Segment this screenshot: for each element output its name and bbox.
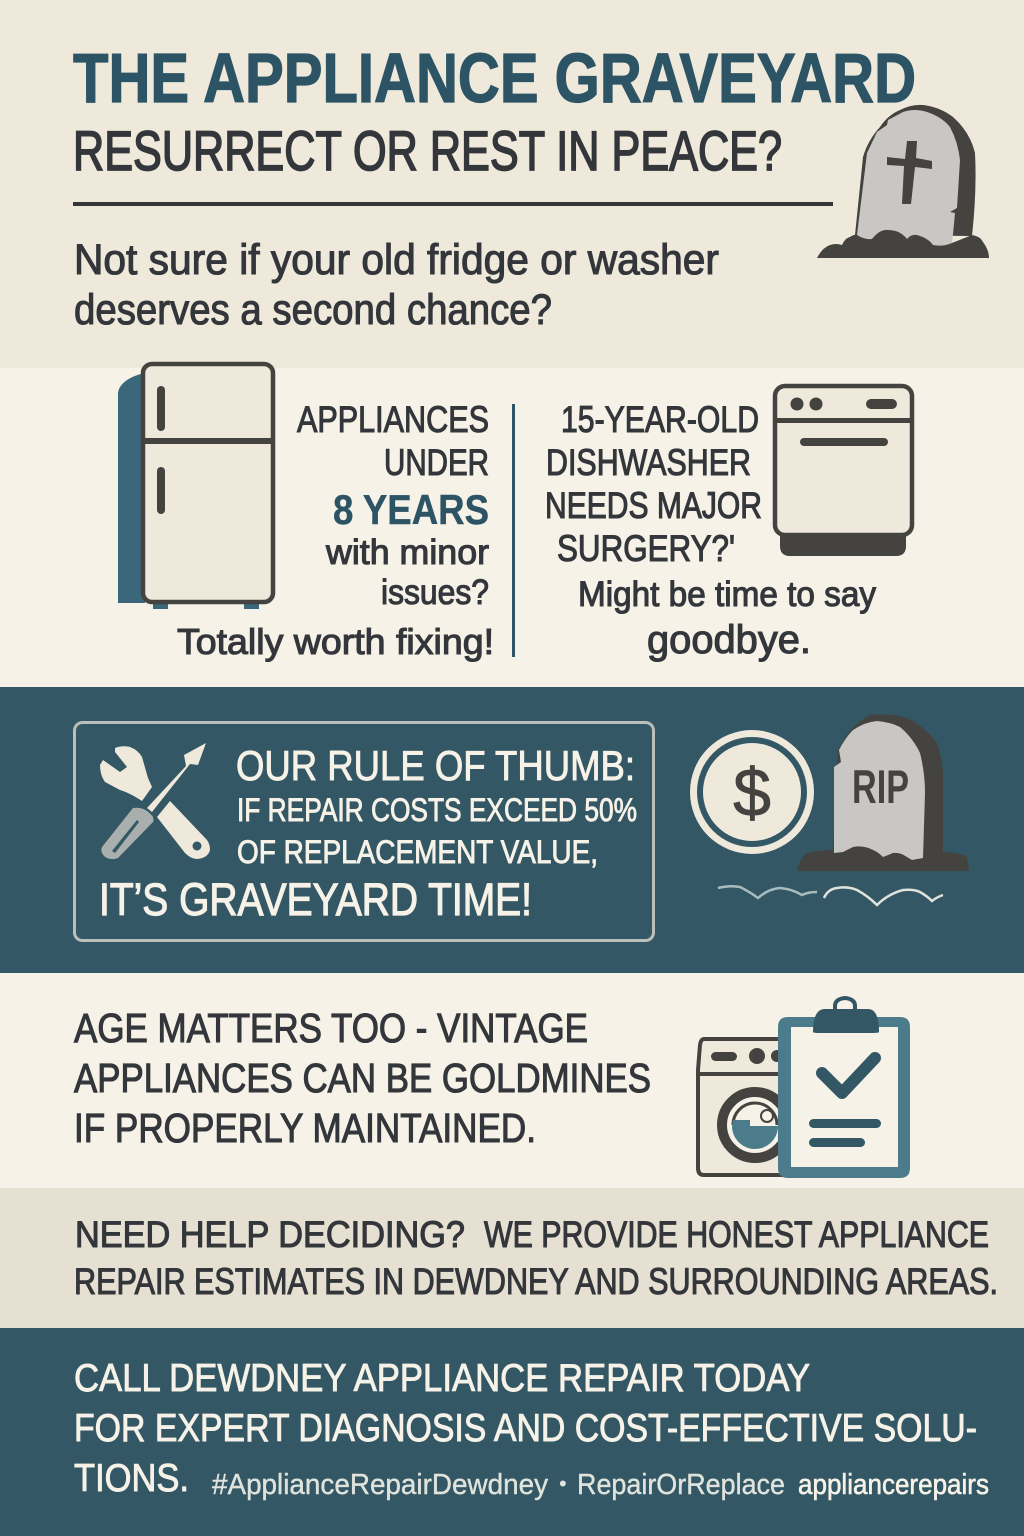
- subtitle: RESURRECT OR REST IN PEACE?: [73, 119, 782, 182]
- title rule: [73, 202, 833, 206]
- text block: 15-year-old dishwasher: 15-YEAR-OLD: [561, 399, 759, 440]
- icon: RIP tombstone: RIP: [852, 760, 909, 813]
- icon: crossed wrench and screwdriver: [100, 743, 210, 859]
- panel: call to action background: [0, 1328, 1024, 1536]
- icon: tombstone with cross: [817, 105, 989, 258]
- panel: age matters background: [0, 973, 1024, 1188]
- text block: under 8 years: with minor: [325, 533, 489, 572]
- text block: need help deciding: [74, 1214, 998, 1302]
- column divider: [512, 404, 515, 657]
- text block: age matters: IF PROPERLY MAINTAINED.: [74, 1105, 536, 1151]
- hashtags: [212, 1469, 989, 1501]
- text block: 15-year-old dishwasher: Might be time to say: [578, 575, 876, 614]
- panel: rule of thumb background: [0, 687, 1024, 973]
- hashtags: RepairOrReplace: [577, 1469, 785, 1501]
- text block: under 8 years: Totally worth fixing!: [177, 621, 494, 662]
- text block: 15-year-old dishwasher: goodbye.: [647, 618, 811, 662]
- hashtags: •: [559, 1471, 567, 1496]
- text block: 15-year-old dishwasher: DISHWASHER: [546, 442, 751, 483]
- panel: comparison background: [0, 368, 1024, 687]
- text block: under 8 years: issues?: [381, 573, 489, 612]
- text block: age matters: APPLIANCES CAN BE GOLDMINES: [74, 1055, 651, 1101]
- text block: call to action: TIONS.: [74, 1457, 189, 1500]
- text block: 15-year-old dishwasher: [545, 399, 876, 662]
- icon: RIP tombstone: [797, 714, 969, 871]
- icon: dollar coin: [690, 730, 814, 854]
- intro text: deserves a second chance?: [74, 286, 552, 334]
- icon: dishwasher: [775, 386, 912, 556]
- text block: 15-year-old dishwasher: SURGERY?': [557, 528, 735, 569]
- intro text: Not sure if your old fridge or washer: [74, 236, 719, 284]
- text block: age matters: AGE MATTERS TOO - VINTAGE: [74, 1005, 588, 1051]
- text block: call to action: [74, 1357, 977, 1500]
- panel: header background: [0, 0, 1024, 368]
- callout text: OUR RULE OF THUMB:: [236, 742, 635, 789]
- icon: dollar coin: $: [733, 755, 771, 831]
- text block: age matters: [74, 1005, 651, 1151]
- icon: refrigerator: [118, 364, 273, 609]
- callout: rule of thumb: [74, 722, 654, 940]
- intro text: [74, 236, 719, 334]
- text block: under 8 years: 8 YEARS: [333, 486, 489, 533]
- text block: 15-year-old dishwasher: NEEDS MAJOR: [545, 485, 762, 526]
- text block: under 8 years: APPLIANCES: [297, 399, 489, 440]
- callout text: IT’S GRAVEYARD TIME!: [99, 874, 532, 925]
- text block: need help deciding: NEED HELP DECIDING?: [75, 1214, 465, 1255]
- text block: call to action: CALL DEWDNEY APPLIANCE REPAIR TODAY: [74, 1357, 810, 1400]
- callout text: OF REPLACEMENT VALUE,: [237, 834, 598, 870]
- icon: washing machine: [697, 1039, 792, 1175]
- text block: under 8 years: [177, 399, 494, 662]
- callout text: [99, 742, 637, 925]
- panel: need help background: [0, 1188, 1024, 1328]
- hashtags: appliancerepairs: [798, 1469, 989, 1501]
- hashtags: #ApplianceRepairDewdney: [212, 1469, 548, 1501]
- icon: ground swooshes: [718, 886, 943, 905]
- callout text: IF REPAIR COSTS EXCEED 50%: [237, 792, 637, 828]
- text block: under 8 years: UNDER: [384, 442, 489, 483]
- icon: clipboard with checkmark: [778, 998, 910, 1178]
